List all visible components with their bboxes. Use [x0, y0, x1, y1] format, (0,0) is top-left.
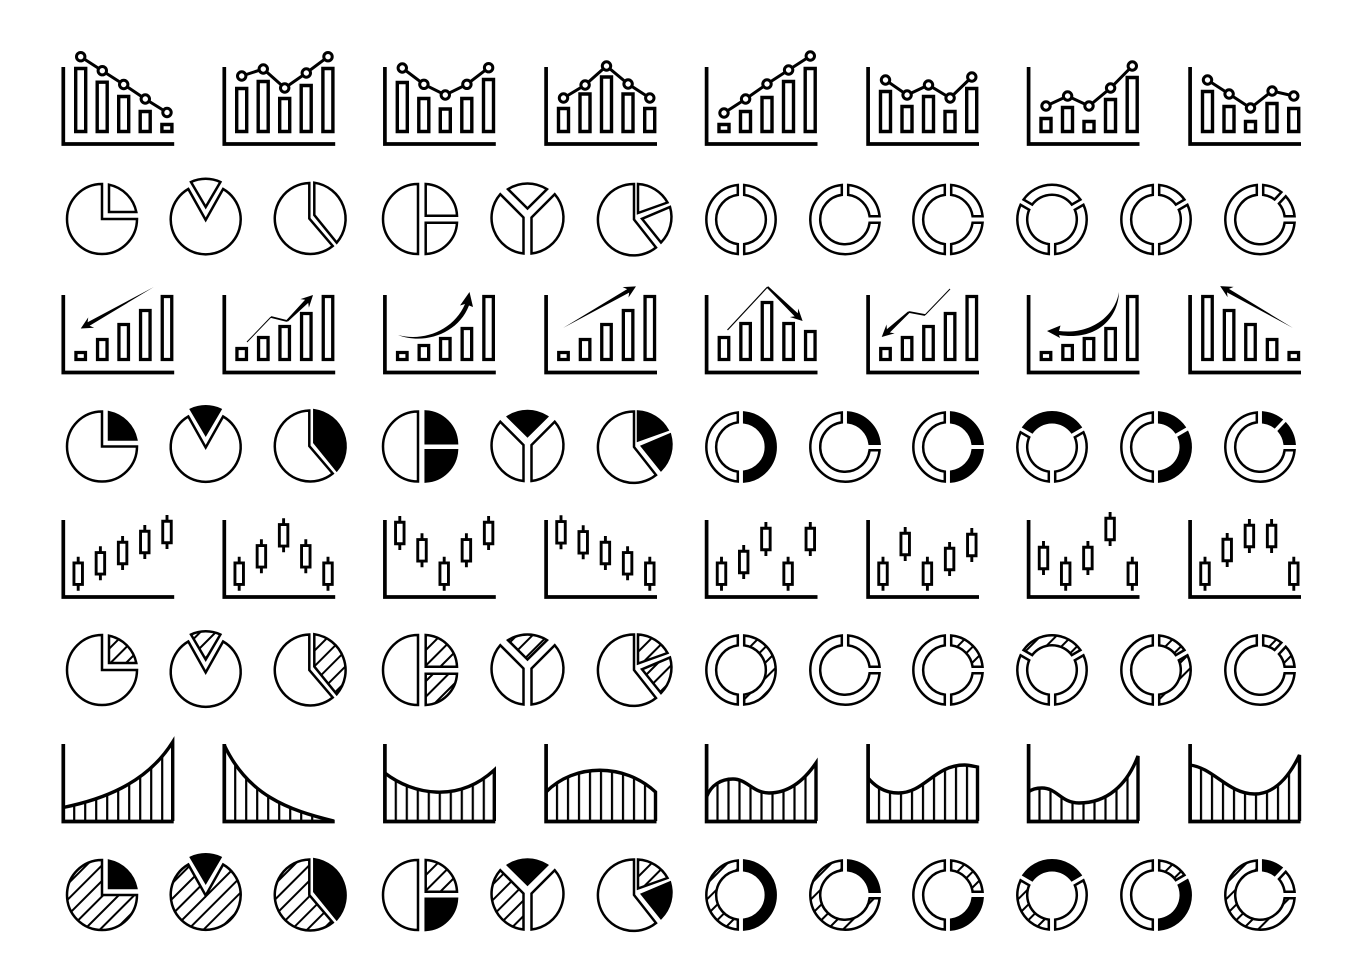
donut: solid top — [1017, 412, 1087, 482]
row 7: area charts with vertical lines — [63, 742, 1301, 822]
pie: half and two quarters — [383, 184, 457, 254]
donut: solid small arc, hatched big arc — [1225, 860, 1295, 930]
donut: half and two quarters — [913, 185, 983, 254]
donut: two hatched arcs — [1121, 635, 1191, 705]
chart: zigzag arrow up — [224, 295, 335, 372]
chart: straight arrow up — [546, 295, 657, 372]
chart: zigzag arrow down — [868, 295, 979, 372]
area: small hill then steep rise — [1028, 744, 1139, 822]
arrow: peak then down — [728, 283, 807, 330]
candlestick: mixed A — [707, 520, 818, 597]
pie: quarter slice — [67, 184, 137, 254]
pie: hatched and solid slices — [598, 859, 671, 931]
candlestick: falling — [546, 515, 657, 597]
chart: curved arrow up — [385, 295, 496, 372]
pie: hatched and solid quarters — [383, 860, 457, 930]
donut: solid right half — [706, 412, 776, 482]
pie: solid quarter, hatched rest — [67, 860, 137, 930]
pie: three slices — [598, 184, 671, 255]
pie: three way — [492, 183, 563, 254]
candlestick: valley — [385, 516, 496, 597]
donut: two small hatched arcs — [1225, 635, 1295, 705]
chart: fall then recover — [1190, 67, 1301, 144]
row 4: pies and donuts with solid slices — [67, 406, 1295, 483]
candlestick: mixed C — [1029, 512, 1140, 597]
pie: two hatched slices — [598, 634, 671, 706]
arrow: straight up-left — [1217, 281, 1296, 333]
row 2: outline pies and donuts — [67, 179, 1295, 255]
area: fall then rise — [1190, 744, 1300, 822]
pie: solid wedge — [171, 406, 241, 482]
chart: dip then rise — [224, 52, 335, 144]
pie: hatched large slice — [275, 634, 346, 705]
pie: solid top, hatched left — [492, 859, 563, 930]
pie: two solid slices — [598, 411, 671, 483]
pie: two solid quarters — [383, 412, 457, 482]
arrow: zigzag down-left — [878, 289, 950, 341]
pie: solid quarter — [67, 412, 137, 482]
chart: peak with arrow — [707, 295, 818, 372]
candlestick: mixed B — [868, 520, 979, 597]
chart: curved arrow left — [1029, 295, 1140, 372]
chart: wobble then rise — [1029, 62, 1140, 144]
donut: hatched quarter — [913, 635, 983, 705]
area: hill then rise — [706, 744, 817, 822]
donut: two small solid arcs — [1225, 412, 1295, 482]
row 3: bar charts with trend arrows — [63, 281, 1301, 372]
area: valley curve — [385, 744, 495, 822]
chart: valley — [385, 63, 496, 144]
arrow: straight up-right — [560, 281, 639, 333]
pie: solid large slice — [275, 410, 346, 481]
arrow: zigzag up-right — [247, 291, 317, 342]
donut: half and two arcs — [1121, 185, 1191, 254]
pie: solid wedge, hatched rest — [171, 854, 241, 930]
row 8: pies and donuts with solid and hatched slices — [67, 854, 1295, 931]
pie: large slice — [275, 183, 346, 254]
donut: big arc and two small — [1225, 185, 1295, 254]
row 5: candlestick charts — [63, 512, 1301, 597]
donut: two solid arcs — [1121, 412, 1191, 482]
pie: hatched top — [492, 634, 563, 704]
pie: solid top — [492, 411, 563, 481]
pie: hatched wedge — [171, 631, 241, 707]
pie: two hatched quarters — [383, 635, 457, 705]
candlestick: rising — [63, 515, 174, 597]
area: hill curve — [546, 744, 656, 822]
donut: two solid quarters — [913, 412, 983, 482]
area: rising curve — [63, 742, 174, 822]
arrow: curve left — [1047, 292, 1119, 338]
donut: hatched and solid quarters — [913, 860, 983, 930]
candlestick: mixed D — [1190, 519, 1301, 597]
area: dip then hill — [868, 744, 978, 822]
pie: top wedge — [171, 179, 241, 254]
chart: arrow falling along rising bars — [63, 295, 174, 372]
donut: three way — [1017, 185, 1087, 254]
donut: hatched top, solid right — [1121, 860, 1191, 930]
chart: rising bars and line — [707, 52, 818, 144]
arrow: straight down-left — [78, 282, 157, 334]
donut: solid top, hatched left — [1017, 860, 1087, 930]
chart: zigzag — [868, 67, 979, 144]
donut: hatched right half — [706, 635, 776, 705]
donut: hatched top — [1017, 635, 1087, 705]
candlestick: peak — [224, 518, 335, 597]
chart: peak — [546, 62, 657, 144]
donut: solid quarter — [810, 412, 880, 482]
pie: hatched quarter — [67, 635, 137, 705]
donut: quarter and rest — [810, 185, 880, 254]
chart: falling bars and line — [63, 52, 174, 144]
row 6: pies and donuts with hatched slices — [67, 631, 1295, 707]
pie: solid slice, hatched rest — [275, 859, 346, 930]
donut: solid right, hatched left — [706, 860, 776, 930]
donut: plain — [810, 635, 880, 705]
row 1: bar charts with line overlay — [63, 52, 1301, 144]
chart: falling bars with arrow — [1190, 295, 1301, 372]
donut: solid quarter, hatched rest — [810, 860, 880, 930]
arrow: curve up — [398, 292, 473, 339]
area: falling curve — [224, 744, 335, 822]
donut: two halves — [706, 185, 776, 254]
